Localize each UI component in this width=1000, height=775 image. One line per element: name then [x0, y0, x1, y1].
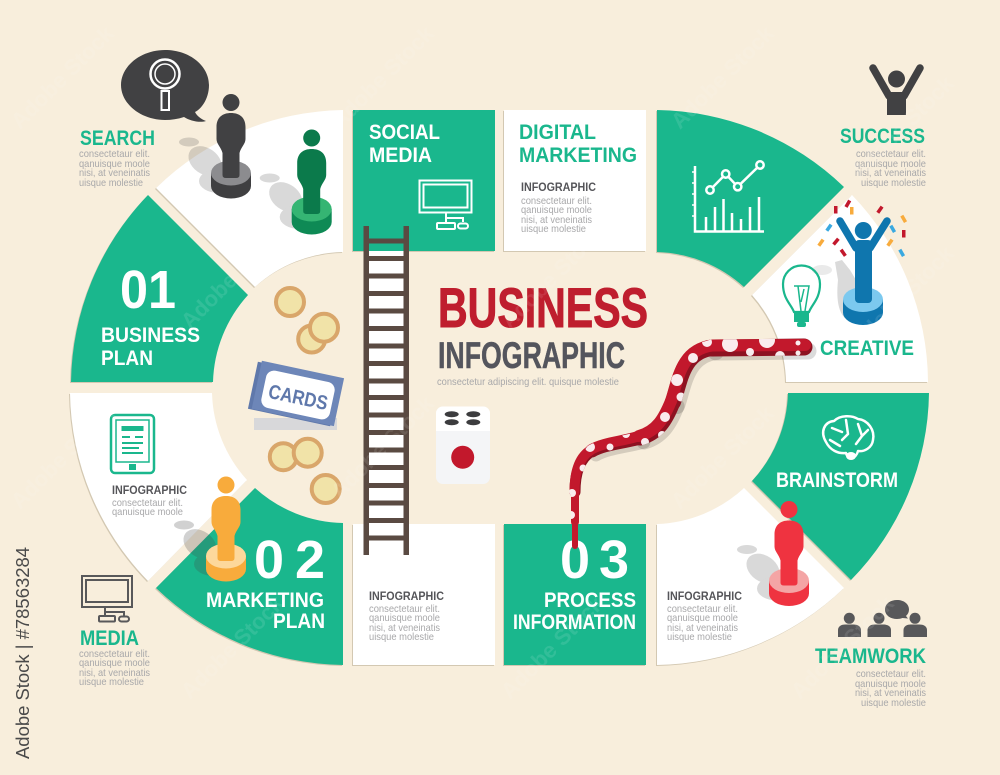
- text: digital marketing infographic: uisque molestie: [521, 223, 586, 235]
- text: infographic bottom: uisque molestie: [369, 631, 434, 643]
- text: Adobe Stock: [176, 220, 289, 334]
- heading: success: SUCCESS: [840, 125, 925, 148]
- label: 01 business plan: PLAN: [101, 347, 153, 370]
- text: infographic bottom: nisi, at veneinatis: [369, 622, 440, 634]
- icon: light bulb: [783, 266, 820, 327]
- label: 01 business plan: [101, 260, 200, 370]
- label: 02 marketing plan: PLAN: [273, 610, 325, 633]
- heading: success: qanuisque moole: [855, 158, 926, 170]
- label: social media: SOCIAL: [369, 121, 440, 144]
- heading: teamwork: uisque molestie: [861, 697, 926, 709]
- text: infographic bottom: [369, 589, 444, 643]
- stock id vertical text: Adobe Stock | #78563284: [13, 547, 33, 759]
- heading: search: [79, 127, 155, 189]
- title: business infographic: [437, 276, 648, 388]
- text: infographic bottom: consectetaur elit.: [369, 603, 440, 615]
- heading: media: uisque molestie: [79, 676, 144, 688]
- game piece: orange pawn: [174, 476, 246, 582]
- heading: teamwork: consectetaur elit.: [856, 668, 926, 680]
- label: 03 process information: 03: [560, 530, 629, 590]
- tile: 02 marketing plan: [156, 488, 343, 665]
- coins top: [276, 288, 338, 352]
- ladder: [364, 226, 409, 555]
- text: infographic left: qanuisque moole: [112, 506, 183, 518]
- heading: teamwork: [815, 645, 926, 709]
- heading: success: [840, 125, 926, 189]
- game piece: green pawn: [260, 130, 332, 234]
- heading: teamwork: qanuisque moole: [855, 678, 926, 690]
- icon: teamwork: [838, 600, 927, 637]
- label: digital marketing: MARKETING: [519, 144, 637, 167]
- tile: digital marketing: [504, 110, 646, 251]
- text: infographic left: INFOGRAPHIC: [112, 483, 187, 497]
- heading: search: consectetaur elit.: [79, 148, 150, 160]
- heading: search: uisque molestie: [79, 177, 143, 189]
- label: digital marketing: DIGITAL: [519, 121, 596, 144]
- text: infographic left: consectetaur elit.: [112, 497, 183, 509]
- text: infographic bottom right: [667, 589, 742, 643]
- tile: creative: [752, 195, 928, 382]
- text: infographic bottom right: INFOGRAPHIC: [667, 589, 742, 603]
- text: Adobe Stock: [6, 20, 119, 134]
- text: Adobe Stock: [496, 590, 609, 704]
- text: Adobe Stock: [496, 220, 609, 334]
- tile: social media: [353, 110, 495, 251]
- label: creative: CREATIVE: [820, 337, 914, 360]
- heading: search: qanuisque moole: [79, 158, 150, 170]
- title: business infographic: BUSINESS: [438, 276, 648, 339]
- tile: brainstorm: [752, 393, 929, 580]
- heading: success: nisi, at veneinatis: [855, 167, 926, 179]
- heading: success: consectetaur elit.: [856, 148, 926, 160]
- heading: teamwork: nisi, at veneinatis: [855, 687, 926, 699]
- tile: 01 business plan: [71, 195, 248, 382]
- heading: media: [79, 627, 150, 688]
- text: Adobe Stock: [326, 20, 439, 134]
- game piece: red pawn: [737, 501, 809, 606]
- label: 01 business plan: BUSINESS: [101, 324, 200, 347]
- label: social media: MEDIA: [369, 144, 432, 167]
- heading: media: nisi, at veneinatis: [79, 667, 150, 679]
- confetti: [817, 200, 907, 257]
- text: Adobe Stock: [846, 70, 959, 184]
- dice: [436, 406, 490, 484]
- icon: chart: [692, 161, 764, 232]
- search speech bubble with magnifier: [121, 50, 209, 122]
- text: digital marketing infographic: INFOGRAPHIC: [521, 180, 596, 194]
- icon: social media monitor: [420, 180, 472, 229]
- heading: search: nisi, at veneinatis: [79, 167, 150, 179]
- icon: brain: [823, 416, 873, 460]
- label: 01 business plan: 01: [120, 260, 176, 320]
- text: infographic bottom: qanuisque moole: [369, 612, 440, 624]
- icon: media monitor: [82, 576, 132, 622]
- text: Adobe Stock: [666, 400, 779, 514]
- cards deck: CARDS: [266, 381, 330, 415]
- text: Adobe Stock: [846, 240, 959, 354]
- text: digital marketing infographic: nisi, at veneinatis: [521, 214, 592, 226]
- title: business infographic: INFOGRAPHIC: [438, 335, 625, 376]
- icon: tablet: [111, 415, 154, 473]
- text: digital marketing infographic: [521, 180, 596, 235]
- tile: infographic bottom right: [657, 488, 844, 665]
- label: brainstorm: BRAINSTORM: [776, 469, 898, 492]
- label: 03 process information: PROCESS: [544, 589, 636, 612]
- heading: teamwork: TEAMWORK: [815, 645, 926, 668]
- label: 02 marketing plan: MARKETING: [206, 589, 324, 612]
- heading: media: qanuisque moole: [79, 657, 150, 669]
- text: Adobe Stock: [176, 590, 289, 704]
- text: digital marketing infographic: qanuisque moole: [521, 204, 592, 216]
- game piece shadow: blue figure: [812, 260, 868, 322]
- heading: media: MEDIA: [80, 627, 139, 650]
- snake: [567, 332, 808, 546]
- text: infographic left: [112, 483, 187, 518]
- text: Adobe Stock: [326, 390, 439, 504]
- label: 03 process information: [513, 530, 636, 634]
- game piece: dark pawn: [179, 94, 251, 198]
- tile: infographic left: [70, 393, 247, 581]
- label: digital marketing: [519, 121, 637, 167]
- label: 02 marketing plan: [206, 530, 325, 633]
- game piece: blue celebrating figure: [840, 221, 887, 325]
- text: infographic bottom: INFOGRAPHIC: [369, 589, 444, 603]
- text: Adobe Stock: [6, 400, 119, 514]
- text: infographic bottom right: qanuisque moole: [667, 612, 738, 624]
- label: 02 marketing plan: 02: [254, 530, 325, 590]
- tile: infographic bottom: [353, 524, 495, 665]
- tile: search: [156, 110, 343, 287]
- text: infographic bottom right: consectetaur elit.: [667, 603, 738, 615]
- text: digital marketing infographic: consectetaur elit.: [521, 195, 592, 207]
- text: Adobe Stock: [786, 590, 899, 704]
- board track tiles: [70, 110, 929, 665]
- heading: success: uisque molestie: [861, 177, 926, 189]
- text: infographic bottom right: nisi, at veneinatis: [667, 622, 738, 634]
- tile: process information: [504, 524, 646, 665]
- tile: chart: [657, 110, 844, 287]
- label: social media: [369, 121, 440, 167]
- heading: search: SEARCH: [80, 127, 155, 150]
- text: Adobe Stock: [666, 20, 779, 134]
- label: 03 process information: INFORMATION: [513, 611, 636, 634]
- cards deck: [248, 361, 344, 430]
- heading: media: consectetaur elit.: [79, 648, 150, 660]
- title: business infographic: consectetur adipiscing elit. quisque molestie: [437, 376, 619, 388]
- icon: success figure: [873, 68, 920, 115]
- text: infographic bottom right: uisque molestie: [667, 631, 732, 643]
- coins bottom: [270, 439, 340, 503]
